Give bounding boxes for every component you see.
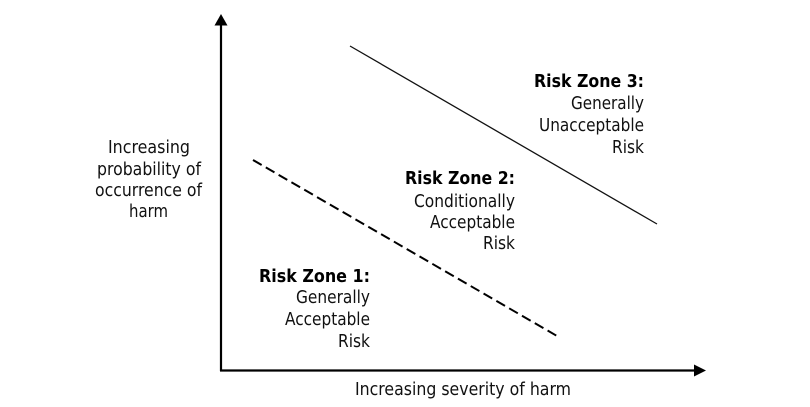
x axis label: Increasing severity of harm [355, 379, 571, 400]
y axis label: harm [129, 201, 168, 222]
y axis label: occurrence of [95, 180, 203, 201]
solid boundary line [350, 46, 657, 224]
risk zone 2 label: Acceptable [430, 212, 515, 233]
risk zone 3 label [534, 71, 644, 158]
y axis label: probability of [97, 159, 202, 180]
risk zone 2 label [405, 168, 515, 254]
risk zone 2 label: Conditionally [414, 191, 515, 212]
risk zone 3 label: Risk Zone 3: [534, 71, 644, 92]
y axis arrow [214, 14, 228, 371]
dashed boundary line [253, 160, 557, 336]
risk zone 3 label: Unacceptable [539, 115, 644, 136]
risk zone 2 label: Risk Zone 2: [405, 168, 515, 189]
risk zone 3 label: Risk [612, 137, 644, 158]
risk zone 1 label: Risk [338, 331, 370, 352]
y axis label: Increasing [108, 137, 190, 158]
x axis arrow [220, 364, 706, 376]
risk zone 1 label: Risk Zone 1: [259, 266, 370, 287]
risk zone 2 label: Risk [483, 233, 515, 254]
risk zone 1 label: Generally [296, 287, 370, 308]
risk zone 1 label [259, 266, 370, 352]
risk zone 3 label: Generally [571, 93, 644, 114]
y axis label [95, 137, 203, 222]
risk zone 1 label: Acceptable [285, 309, 370, 330]
